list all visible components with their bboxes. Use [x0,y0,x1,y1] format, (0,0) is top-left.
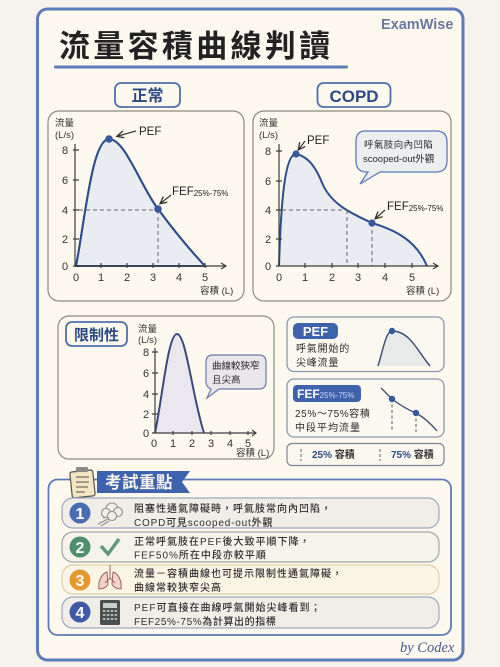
axes: 2 [124,272,130,284]
axes: 0 [62,261,68,273]
PEF marker [292,135,329,158]
legend: dashed line volumes: 75% 容積 [391,448,434,461]
axes: 2 [189,438,195,450]
axes: 3 [355,272,361,284]
panel: normal chart [48,111,244,301]
axes: 容積 (L) [406,285,439,297]
axes: 4 [143,389,149,401]
number 2: 2 [76,540,85,557]
row 2 [62,532,439,562]
y axis label: (L/s) [138,335,157,346]
y axis label: 流量 [138,324,157,335]
panel: FEF definition: 中段平均流量 [295,421,361,434]
panel: exam key points [48,467,451,635]
title: 流量容積曲線判讀 [59,29,333,64]
pill: FEF 25-75: FEF25%-75% [297,387,354,401]
FEF marker: FEF [387,201,409,213]
callout [356,131,447,184]
axes: 5 [202,272,208,284]
icon: calculator [100,600,120,625]
y axis label: 流量 [55,118,74,129]
mini curve: PEF [378,328,430,366]
axes: 3 [208,438,214,450]
banner: 考試重點 [97,471,190,493]
mini curve: FEF [381,388,437,432]
row 3 [62,565,439,594]
brand: ExamWise: ExamWise [381,17,453,33]
axes: 容積 (L) [200,285,233,297]
PEF marker: PEF [307,135,329,147]
text: PEF description: 呼氣開始的 [296,344,350,355]
text: 正常呼氣肢在PEF後大致平順下降， [134,537,310,548]
COPD curve [279,154,427,266]
text: 曲線常較狹窄尖高 [134,581,222,594]
axes: 4 [227,438,233,450]
axes: 0 [143,428,149,440]
axes: 2 [329,272,335,284]
callout: 曲線較狹窄 [212,360,260,372]
banner: 考試重點: 考試重點 [105,472,173,492]
pill: PEF: PEF [303,324,328,339]
FEF marker: 25%-75% [409,204,443,213]
axes: 0 [73,272,79,284]
y axis label: (L/s) [259,130,278,141]
number 1: 1 [76,506,85,523]
number 4 [70,602,90,622]
y axis label: (L/s) [55,130,74,141]
axes [62,144,233,297]
axes: 容積 (L) [236,447,269,459]
axes: 2 [265,234,271,246]
panel: FEF definition [287,379,444,437]
tag: 限制性 [66,322,127,346]
axes: 6 [265,176,271,188]
FEF marker [154,186,228,213]
y axis label: 流量 [259,118,278,129]
restrictive curve [155,334,204,433]
axes [143,347,269,459]
number 2 [70,536,90,558]
axes: 5 [245,438,251,450]
FEF marker: 25%-75% [194,189,228,198]
tag: 正常: 正常 [131,87,164,105]
tag: COPD [318,83,390,107]
tag: 限制性: 限制性 [74,327,119,344]
text: 阻塞性通氣障礙時，呼氣肢常向內凹陷， [134,504,332,515]
axes: 6 [62,175,68,187]
FEF marker: FEF [172,186,194,198]
axes: 8 [143,347,149,359]
number 3 [70,570,90,590]
axes: 0 [151,438,157,450]
axes: 8 [265,146,271,158]
number 3: 3 [76,573,85,590]
icon: lungs [99,565,121,589]
axes: 8 [62,145,68,157]
number 4: 4 [76,605,85,622]
axes: 3 [150,272,156,284]
text: FEF50%所在中段亦較平順 [134,548,267,562]
PEF marker: PEF [139,126,161,138]
axes: 0 [265,261,271,273]
pill: PEF [293,323,338,339]
callout [206,355,266,398]
axes: 1 [170,438,176,450]
row 4 [62,597,439,628]
text: COPD可見scooped-out外觀 [134,516,273,529]
axes: 4 [62,205,68,217]
axes: 4 [176,272,182,284]
axes: 4 [382,272,388,284]
axes: 2 [62,234,68,246]
tag: 正常 [115,83,180,107]
axes: 1 [98,272,104,284]
normal curve [76,139,205,266]
panel: PEF definition [287,317,444,372]
PEF marker [105,126,161,143]
panel: COPD chart [253,111,451,301]
text: 流量－容積曲線也可提示限制性通氣障礙， [134,569,343,580]
number 1 [70,502,90,524]
axes: 2 [143,409,149,421]
panel: restrictive chart [58,316,274,459]
text: PEF可直接在曲線呼氣開始尖峰看到； [134,603,321,614]
axes: 0 [276,272,282,284]
tag: COPD: COPD [329,87,379,106]
row 1 [62,498,439,529]
callout: 且尖高 [212,374,241,386]
callout: scooped-out外觀 [363,153,435,165]
legend: dashed line volumes [287,444,444,466]
text: FEF25%-75%為計算出的指標 [134,615,276,628]
axes: 4 [265,205,271,217]
legend: dashed line volumes: 25% 容積 [312,448,355,461]
text: FEF description: 25%～75%容積 [295,407,370,420]
axes: 5 [409,272,415,284]
pill: FEF 25-75 [293,385,361,402]
text: PEF description: 尖峰流量 [296,356,339,369]
icon: check mark [101,539,119,554]
axes [265,144,439,297]
icon: clipboard [70,467,95,498]
FEF marker [368,201,443,227]
axes: 1 [302,272,308,284]
axes: 6 [143,368,149,380]
signature: by Codex: by Codex [400,640,455,656]
callout: 呼氣肢向內凹陷 [364,139,433,151]
icon: air puff [98,503,122,526]
